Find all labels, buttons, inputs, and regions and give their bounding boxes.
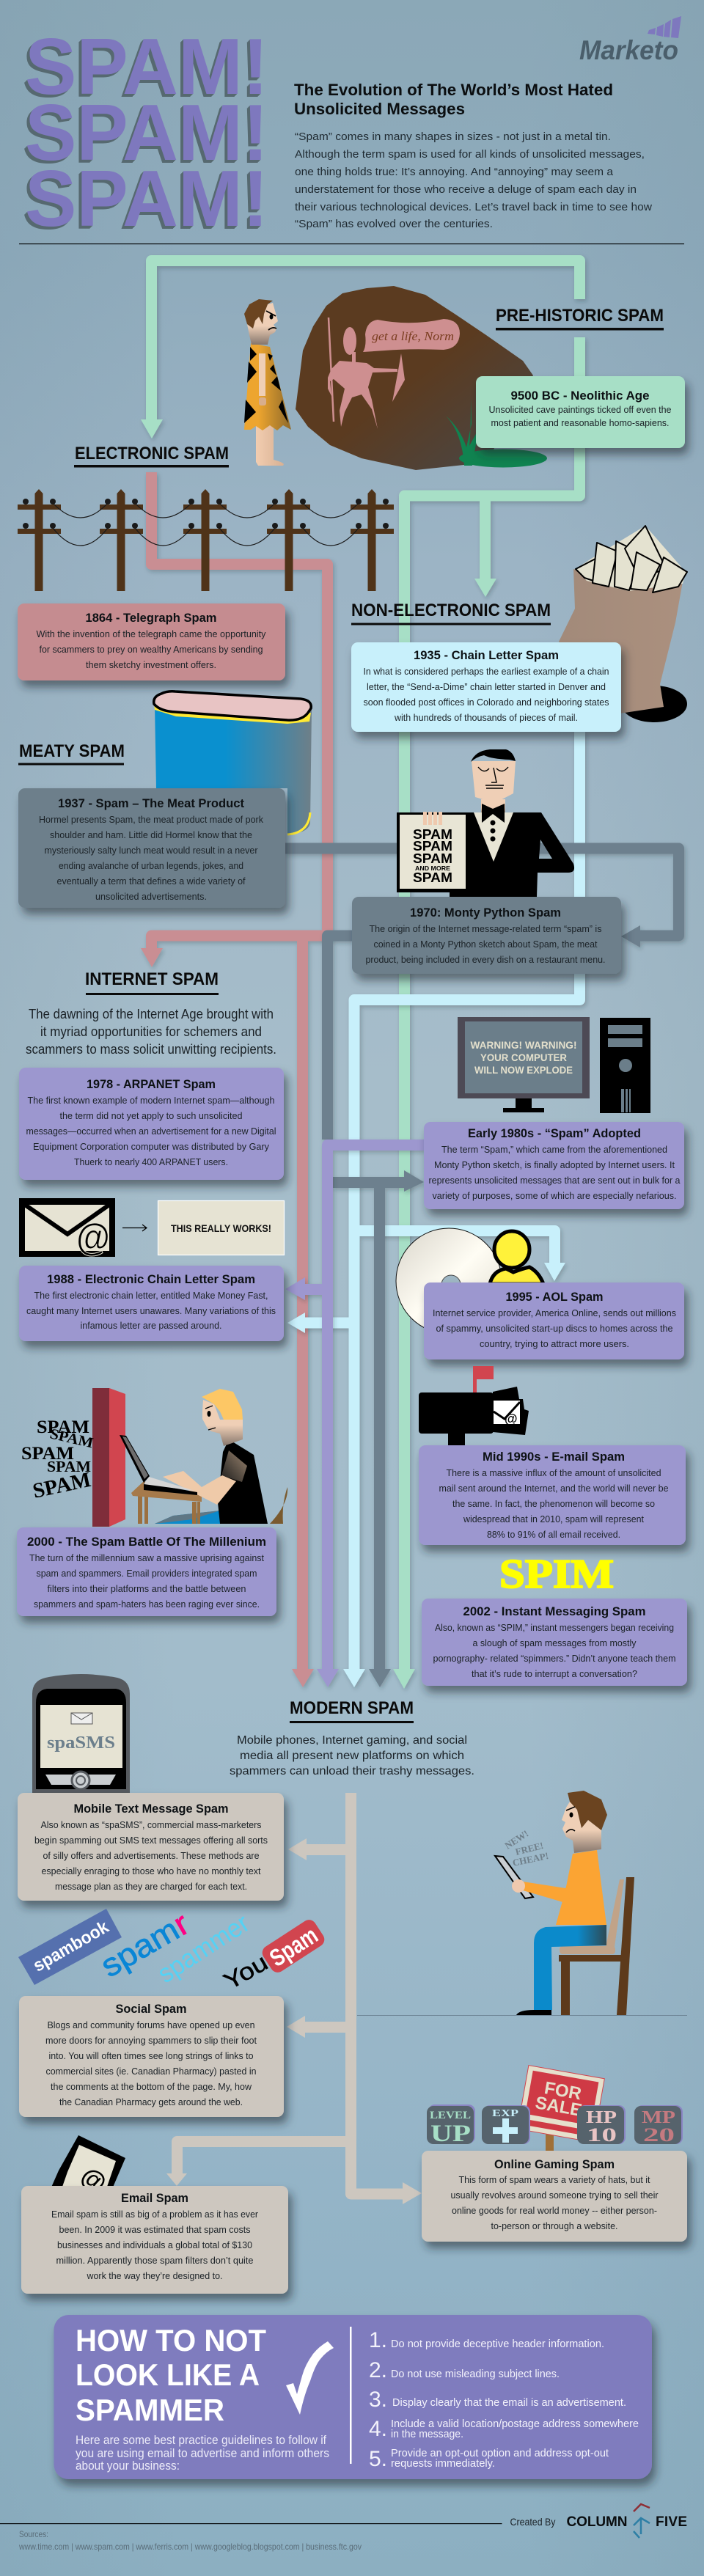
panel: 1935 chain letter: with hundreds of thousands of pieces of mail. xyxy=(394,712,578,723)
panel: mobile text message xyxy=(18,1793,284,1901)
panel: 1988 chain letter: 1988 - Electronic Chain Letter Spam xyxy=(47,1273,255,1286)
numbered guidelines: Do not use misleading subject lines. xyxy=(391,2368,560,2380)
numbered guidelines: 4. xyxy=(369,2417,387,2441)
panel: 2000 spam battle: spammers and spam-haters has been raging ever since. xyxy=(34,1599,260,1610)
numbered guidelines: requests immediately. xyxy=(391,2457,495,2470)
numbered guidelines: 3. xyxy=(369,2388,387,2412)
panel: 9500 BC xyxy=(476,376,685,448)
credit: created by column five: COLUMN xyxy=(566,2514,628,2530)
illustration: cave rock with painting xyxy=(296,286,547,470)
panel: social spam: the Canadian Pharmacy gets around the web. xyxy=(59,2096,243,2107)
illustration: mailbox: @ xyxy=(505,1412,518,1426)
panel: social spam: more doors for annoying spammers to slip their foot xyxy=(45,2035,257,2046)
panel: online gaming: Online Gaming Spam xyxy=(494,2158,615,2171)
timeline arrow: pink xyxy=(141,472,327,1687)
panel: 1995 AOL: 1995 - AOL Spam xyxy=(506,1291,603,1304)
card: this really works: THIS REALLY WORKS! xyxy=(171,1222,271,1234)
logo: YouSpam: You xyxy=(219,1949,272,1995)
logos: social networks parody xyxy=(18,1906,327,1995)
panel: 2002 instant messaging: a slough of spam messages from mostly xyxy=(472,1637,637,1648)
panel: online gaming: online goods for real world money -- either person- xyxy=(452,2205,657,2216)
illustration: phone spaSMS xyxy=(32,1674,130,1793)
panel: online gaming: usually revolves around someone trying to sell their xyxy=(450,2190,659,2201)
panel: social spam: commercial sites (ie. Canadian Pharmacy) pasted in xyxy=(45,2066,257,2077)
numbered guidelines: 2. xyxy=(369,2358,387,2382)
internet intro text: it myriad opportunities for schemers and xyxy=(40,1024,262,1039)
panel: 1937 meat product: shoulder and ham. Little did Hormel know that the xyxy=(50,829,252,840)
modern intro text: media all present new platforms on which xyxy=(240,1750,464,1762)
heading: pre-historic spam: PRE-HISTORIC SPAM xyxy=(496,306,664,326)
panel: 2000 spam battle: The turn of the millennium saw a massive uprising against xyxy=(29,1552,264,1563)
panel: 1978 arpanet: messages—occurred when an advertisement for a new Digital xyxy=(26,1126,276,1137)
heading: LOOK LIKE A xyxy=(76,2357,260,2392)
heading: HOW TO NOT xyxy=(76,2323,266,2357)
logo: spamr: spamr xyxy=(95,1906,195,1984)
panel: mobile text message: especially enraging to those who have no monthly text xyxy=(41,1865,261,1876)
menu text: SPAM xyxy=(413,827,452,842)
panel: early 1980s: Early 1980s - “Spam” Adopted xyxy=(468,1127,641,1140)
badge: hp 10 xyxy=(577,2105,626,2146)
panel: 1978 arpanet: The first known example of modern Internet spam—although xyxy=(28,1095,274,1106)
numbered guidelines xyxy=(369,2328,639,2471)
panel: 1995 AOL xyxy=(424,1283,684,1359)
intro paragraph: Although the term spam is used for all kinds of unsolicited messages, xyxy=(295,148,645,161)
arrow: envelope to card xyxy=(122,1225,147,1231)
panel: 2000 spam battle: 2000 - The Spam Battle Of The Millenium xyxy=(27,1535,266,1549)
timeline arrow: green xyxy=(141,261,579,1689)
panel: 1995 AOL: Internet service provider, America Online, sends out millions xyxy=(433,1307,676,1318)
panel: 2002 instant messaging: Also, known as “SPIM,” instant messengers began receiving xyxy=(435,1622,674,1633)
badge: mp 20 xyxy=(634,2105,683,2146)
spam words: SPAM xyxy=(21,1444,74,1464)
panel: email spam: businesses and individuals a global total of $130 xyxy=(57,2239,252,2250)
warning text: YOUR COMPUTER xyxy=(480,1052,567,1063)
numbered guidelines: 5. xyxy=(369,2447,387,2471)
panel: 2000 spam battle xyxy=(17,1527,276,1616)
menu text: AND MORE xyxy=(415,865,450,872)
panel: email spam: work the way they’re designed to. xyxy=(87,2270,223,2281)
illustration: for sale sign: SALE xyxy=(534,2093,584,2121)
logo: spammer: spammer xyxy=(152,1907,254,1989)
spam words: SPAM xyxy=(47,1458,91,1475)
panel: 1995 AOL: of spammy, unsolicited start-up discs to homes across the xyxy=(436,1323,673,1334)
illustration: mail sack xyxy=(559,526,687,722)
illustration: AOL disc and person xyxy=(396,1228,543,1334)
internet intro text xyxy=(26,1007,276,1057)
panel: 1935 chain letter xyxy=(351,642,621,732)
warning text xyxy=(471,1039,576,1076)
icon: envelope at sign xyxy=(19,1198,115,1259)
logo: spambook xyxy=(18,1909,122,1985)
card: this really works xyxy=(158,1201,285,1255)
panel: 1935 chain letter: soon flooded post offices in Colorado and neighboring states xyxy=(364,697,609,708)
panel: mid 1990s email: mail sent around the Internet, and the world will never be xyxy=(439,1483,669,1494)
badge: hp 10: 10 xyxy=(587,2124,617,2146)
illustration: waiter with menu xyxy=(397,749,574,897)
warning text: WILL NOW EXPLODE xyxy=(474,1064,573,1076)
modern intro text: spammers can unload their trashy messages. xyxy=(230,1765,474,1777)
numbered guidelines: Include a valid location/postage address somewhere xyxy=(391,2418,639,2430)
panel: mid 1990s email xyxy=(419,1445,686,1545)
panel: 1978 arpanet: the term did not yet apply to such unsolicited xyxy=(60,1110,242,1121)
panel: social spam: into. You will often times see long strings of links to xyxy=(48,2050,254,2061)
illustration: telegraph poles xyxy=(18,489,394,591)
intro paragraph: understatement for those who receive a deluge of spam each day in xyxy=(295,183,637,196)
intro paragraph: their various technological devices. Let’s travel back in time to see how xyxy=(295,201,652,213)
panel: social spam: the comments at the bottom of the page. My, how xyxy=(51,2081,252,2092)
numbered guidelines: Provide an opt-out option and address opt-out xyxy=(391,2447,609,2459)
panel: 2000 spam battle: filters into their platforms and the battle between xyxy=(47,1583,246,1594)
heading: meaty spam: MEATY SPAM xyxy=(19,741,125,761)
panel: 1864 telegraph: With the invention of the telegraph came the opportunity xyxy=(37,628,266,639)
illustration: for sale sign: FOR xyxy=(543,2078,583,2104)
logo: Marketo: Marketo xyxy=(579,35,678,65)
icon: tilted email: @ xyxy=(76,2162,111,2198)
panel: 1864 telegraph: for scammers to prey on wealthy Americans by sending xyxy=(40,644,263,655)
panel: early 1980s xyxy=(424,1122,684,1209)
logo: YouSpam: Spam xyxy=(265,1921,323,1972)
badge: level up: LEVEL xyxy=(430,2110,471,2121)
spam messages on tablet: FREE! xyxy=(514,1840,545,1857)
panel: 9500 BC: Unsolicited cave paintings ticked off even the xyxy=(488,404,672,415)
intro paragraph: one thing holds true: It’s annoying. And “annoying” may seem a xyxy=(295,166,614,178)
panel: 1937 meat product: mysteriously salty lunch meat would result in a never xyxy=(44,845,258,856)
panel: 1935 chain letter: In what is considered perhaps the earliest example of a chain xyxy=(364,666,609,677)
panel: email spam: Email spam is still as big of a problem as it has ever xyxy=(51,2209,259,2220)
numbered guidelines: 1. xyxy=(369,2328,387,2352)
subtitle: The Evolution of The World’s Most Hated xyxy=(294,81,613,99)
panel: 1937 meat product: Hormel presents Spam, the meat product made of pork xyxy=(39,814,263,825)
guideline intro: you are using email to advertise and inform others xyxy=(76,2446,329,2460)
panel: mid 1990s email: the same. In fact, the phenomenon will become so xyxy=(452,1498,655,1509)
panel: 1935 chain letter: letter, the “Send-a-Dime” chain letter started in Denver and xyxy=(367,681,606,692)
panel: mobile text message: message plan as they are charged for each text. xyxy=(55,1881,247,1892)
panel: 2002 instant messaging: pornography- related “spimmers.” Didn’t anyone teach them xyxy=(433,1653,676,1664)
guideline intro: about your business: xyxy=(76,2459,180,2473)
internet intro text: scammers to mass solicit unwitting recipients. xyxy=(26,1042,276,1057)
panel: 9500 BC: 9500 BC - Neolithic Age xyxy=(510,389,650,403)
panel: 2002 instant messaging xyxy=(422,1599,687,1686)
panel: 1988 chain letter: The first electronic chain letter, entitled Make Money Fast, xyxy=(34,1290,268,1301)
panel: social spam: Social Spam xyxy=(116,2003,186,2016)
guideline intro xyxy=(76,2433,329,2473)
menu text xyxy=(413,827,452,885)
logo: Marketo xyxy=(579,16,681,65)
timeline arrow: light blue xyxy=(287,732,579,1687)
icon: envelope at sign: @ xyxy=(76,1217,110,1259)
heading: internet spam: INTERNET SPAM xyxy=(85,969,219,989)
panel: early 1980s: Monty Python sketch, is finally adopted by Internet users. It xyxy=(434,1159,675,1170)
panel: online gaming xyxy=(422,2151,687,2242)
guideline intro: Here are some best practice guidelines to follow if xyxy=(76,2433,326,2447)
illustration: computer warning xyxy=(458,1017,650,1113)
illustration: man reading tablet xyxy=(495,1791,634,2015)
spam messages on tablet xyxy=(502,1828,549,1868)
badge: exp plus xyxy=(482,2105,530,2144)
title: Spam Spam Spam: SPAM! xyxy=(25,88,268,177)
menu text: SPAM xyxy=(413,870,452,885)
title: Spam Spam Spam xyxy=(25,22,268,243)
panel: social spam: Blogs and community forums have opened up even xyxy=(47,2019,255,2030)
panel: 1937 meat product: 1937 - Spam – The Meat Product xyxy=(58,797,245,810)
panel: mid 1990s email: 88% to 91% of all email received. xyxy=(487,1529,620,1540)
panel: mobile text message: of silly offers and advertisements. These methods are xyxy=(43,1850,260,1861)
panel: email spam: Email Spam xyxy=(121,2192,188,2205)
panel: 1937 meat product: ending avalanche of urban legends, jokes, and xyxy=(59,860,243,871)
sources: Sources: xyxy=(19,2529,48,2539)
numbered guidelines: Display clearly that the email is an advertisement. xyxy=(392,2396,626,2409)
panel: social spam xyxy=(19,1996,284,2117)
spam words: SPAM xyxy=(31,1468,93,1503)
heading: non-electronic spam: NON-ELECTRONIC SPAM xyxy=(351,601,551,620)
logo: SPIM: SPIM xyxy=(499,1552,614,1597)
panel: 1937 meat product xyxy=(18,788,285,908)
panel: 1988 chain letter xyxy=(19,1266,284,1341)
panel: 9500 BC: most patient and reasonable homo-sapiens. xyxy=(491,417,669,428)
warning text: WARNING! WARNING! xyxy=(471,1039,576,1051)
heading: SPAMMER xyxy=(76,2393,224,2427)
heading: electronic spam: ELECTRONIC SPAM xyxy=(75,444,229,463)
badge: level up xyxy=(427,2105,475,2147)
panel: early 1980s: represents unsolicited messages that are sent out in bulk for a xyxy=(428,1175,681,1186)
intro paragraph xyxy=(295,131,652,230)
modern intro text xyxy=(230,1734,474,1777)
subtitle: Unsolicited Messages xyxy=(294,100,465,118)
menu text: SPAM xyxy=(413,839,452,854)
logo: spambook: spambook xyxy=(30,1917,112,1976)
badge: mp 20: MP xyxy=(642,2108,675,2127)
badge: exp plus: EXP xyxy=(492,2108,519,2119)
panel: 1864 telegraph: 1864 - Telegraph Spam xyxy=(85,612,217,625)
logo: YouSpam xyxy=(219,1917,327,1995)
badge: mp 20: 20 xyxy=(643,2124,675,2146)
panel: mobile text message: Also known as “spaSMS”, commercial mass-marketers xyxy=(41,1819,262,1830)
panel: 1978 arpanet: Equipment Corporation computer was distributed by Gary xyxy=(33,1141,269,1152)
panel: 1935 chain letter: 1935 - Chain Letter Spam xyxy=(414,649,559,662)
panel: 1970 monty python: product, being included in every dish on a restaurant menu. xyxy=(365,954,606,965)
illustration: caveman xyxy=(244,299,291,466)
illustration: mailbox xyxy=(419,1366,529,1445)
timeline arrow: beige modern spam trunk xyxy=(166,1793,422,2204)
numbered guidelines: in the message. xyxy=(391,2428,463,2440)
panel: mid 1990s email: widespread that in 2010, spam will represent xyxy=(463,1513,644,1524)
panel: 1864 telegraph: them sketchy investment offers. xyxy=(86,659,216,670)
illustration: spam can xyxy=(154,691,312,834)
credit: created by column five: Created By xyxy=(510,2516,556,2528)
panel: 1864 telegraph xyxy=(18,603,285,680)
panel: early 1980s: The term “Spam,” which came from the aforementioned xyxy=(441,1144,667,1155)
spam words: SPAM xyxy=(48,1425,95,1451)
icon: check mark xyxy=(286,2341,334,2415)
subtitle xyxy=(294,81,613,118)
panel: 1978 arpanet xyxy=(19,1068,284,1180)
panel: 1970 monty python: 1970: Monty Python Spam xyxy=(410,906,561,920)
spam messages on tablet: NEW! xyxy=(502,1828,530,1852)
internet intro text: The dawning of the Internet Age brought with xyxy=(29,1007,274,1021)
timeline arrow: purple xyxy=(285,1145,424,1687)
intro paragraph: “Spam” comes in many shapes in sizes - not just in a metal tin. xyxy=(295,131,611,143)
sources: www.time.com | www.spam.com | www.ferris.com | www.googleblog.blogspot.com | business.ftc.gov xyxy=(18,2542,362,2552)
panel: mid 1990s email: There is a massive influx of the amount of unsolicited xyxy=(446,1467,661,1478)
spam words: SPAM xyxy=(37,1417,89,1437)
illustration: spam wall and laptop user xyxy=(21,1388,287,1527)
panel: early 1980s: variety of purposes, some of which are especially nefarious. xyxy=(433,1190,676,1201)
illustration: phone spaSMS: spaSMS xyxy=(47,1733,115,1753)
heading xyxy=(76,2323,266,2427)
intro paragraph: “Spam” has evolved over the centuries. xyxy=(295,218,493,230)
panel: 2002 instant messaging: that it’s rude to interrupt a conversation? xyxy=(472,1668,637,1679)
spam words xyxy=(21,1417,95,1503)
panel: email spam xyxy=(21,2186,288,2294)
illustration: for sale sign xyxy=(518,2066,604,2151)
panel: email spam: been. In 2009 it was estimated that spam costs xyxy=(59,2224,251,2235)
panel: 1978 arpanet: Thuerk to nearly 400 ARPANET users. xyxy=(74,1156,228,1167)
panel: 2002 instant messaging: 2002 - Instant Messaging Spam xyxy=(463,1605,645,1618)
panel: 1970 monty python: The origin of the Internet message-related term “spam” is xyxy=(370,923,602,934)
sources xyxy=(18,2529,362,2552)
title: Spam Spam Spam: SPAM! xyxy=(25,22,268,111)
timeline arrow: slate xyxy=(285,848,679,1687)
badge: level up: UP xyxy=(430,2121,471,2147)
panel: 1995 AOL: country, trying to attract more users. xyxy=(480,1338,629,1349)
title: Spam Spam Spam: SPAM! xyxy=(25,154,268,243)
modern intro text: Mobile phones, Internet gaming, and social xyxy=(237,1734,467,1747)
panel: mid 1990s email: Mid 1990s - E-mail Spam xyxy=(483,1450,625,1464)
spam messages on tablet: CHEAP! xyxy=(512,1850,549,1868)
numbered guidelines: Do not provide deceptive header information. xyxy=(391,2338,604,2350)
credit: created by column five: FIVE xyxy=(656,2514,687,2530)
panel: mobile text message: begin spamming out SMS text messages offering all sorts xyxy=(34,1835,268,1846)
credit: created by column five xyxy=(510,2504,687,2538)
panel: 2000 spam battle: spam and spammers. Email providers integrated spam xyxy=(37,1568,257,1579)
panel: 1988 chain letter: infamous letter are passed around. xyxy=(81,1320,221,1331)
panel: mobile text message: Mobile Text Message Spam xyxy=(73,1802,229,1816)
badge: hp 10: HP xyxy=(586,2108,617,2127)
illustration: cave rock with painting: get a life, Norm xyxy=(372,329,454,343)
panel: 1970 monty python xyxy=(352,897,621,974)
panel: online gaming: to-person or through a website. xyxy=(491,2220,617,2231)
heading: modern spam: MODERN SPAM xyxy=(290,1698,414,1718)
panel: how to not look like a spammer xyxy=(54,2315,652,2479)
badges: game stats xyxy=(427,2105,683,2147)
panel: online gaming: This form of spam wears a variety of hats, but it xyxy=(459,2174,650,2185)
panel: 1937 meat product: eventually a term that defines a wide variety of xyxy=(57,876,246,887)
panel: 1988 chain letter: caught many Internet users unawares. Many variations of this xyxy=(26,1305,276,1316)
icon: tilted email xyxy=(51,2135,125,2198)
panel: 1978 arpanet: 1978 - ARPANET Spam xyxy=(87,1078,216,1091)
panel: email spam: million. Apparently those spam filters don’t quite xyxy=(56,2255,254,2266)
menu text: SPAM xyxy=(413,851,452,866)
panel: 1970 monty python: coined in a Monty Python sketch about Spam, the meat xyxy=(374,939,598,950)
panel: 1937 meat product: unsolicited advertisements. xyxy=(95,891,207,902)
